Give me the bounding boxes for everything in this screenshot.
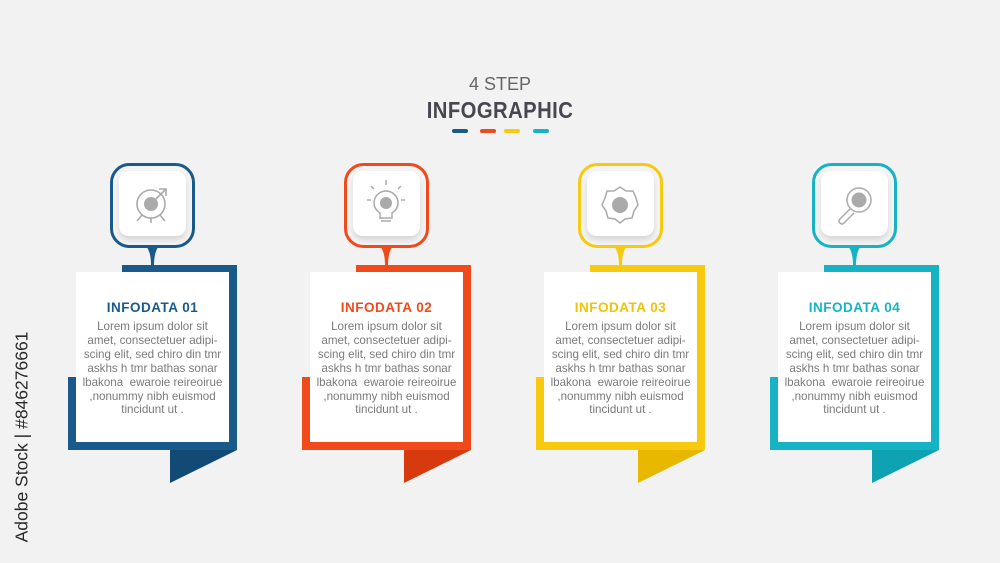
body text: scing elit, sed chiro din tmr: [552, 348, 689, 361]
body text: [551, 320, 690, 416]
body text: ,nonummy nibh euismod: [557, 390, 684, 403]
body text: lbakona ewaroie reireoirue: [551, 376, 690, 389]
body text: scing elit, sed chiro din tmr: [84, 348, 221, 361]
color dashes: [452, 129, 549, 133]
body text: ,nonummy nibh euismod: [323, 390, 450, 403]
body text: amet, consectetuer adipi-: [555, 334, 686, 347]
panel: infodata 02: [302, 163, 471, 483]
body text: Lorem ipsum dolor sit: [799, 320, 910, 333]
title: [427, 74, 573, 133]
body text: lbakona ewaroie reireoirue: [83, 376, 222, 389]
body text: ,nonummy nibh euismod: [791, 390, 918, 403]
body text: tincidunt ut .: [121, 403, 184, 416]
panel: infodata 01: [68, 163, 237, 483]
body text: lbakona ewaroie reireoirue: [785, 376, 924, 389]
body text: amet, consectetuer adipi-: [321, 334, 452, 347]
vertical stock id text: Adobe Stock | #846276661: [12, 332, 32, 542]
body text: [785, 320, 924, 416]
heading: INFODATA 03: [575, 300, 666, 315]
panel: infodata 03: [536, 163, 705, 483]
heading: INFODATA 04: [809, 300, 900, 315]
body text: [317, 320, 456, 416]
body text: lbakona ewaroie reireoirue: [317, 376, 456, 389]
body text: scing elit, sed chiro din tmr: [318, 348, 455, 361]
body text: tincidunt ut .: [355, 403, 418, 416]
body text: amet, consectetuer adipi-: [789, 334, 920, 347]
body text: Lorem ipsum dolor sit: [565, 320, 676, 333]
body text: amet, consectetuer adipi-: [87, 334, 218, 347]
body text: askhs h tmr bathas sonar: [321, 362, 452, 375]
body text: tincidunt ut .: [823, 403, 886, 416]
body text: ,nonummy nibh euismod: [89, 390, 216, 403]
heading: INFODATA 02: [341, 300, 432, 315]
body text: askhs h tmr bathas sonar: [555, 362, 686, 375]
body text: askhs h tmr bathas sonar: [789, 362, 920, 375]
panel: infodata 04: [770, 163, 939, 483]
body text: Lorem ipsum dolor sit: [331, 320, 442, 333]
body text: askhs h tmr bathas sonar: [87, 362, 218, 375]
body text: [83, 320, 222, 416]
heading: INFODATA 01: [107, 300, 198, 315]
body text: scing elit, sed chiro din tmr: [786, 348, 923, 361]
body text: Lorem ipsum dolor sit: [97, 320, 208, 333]
body text: tincidunt ut .: [589, 403, 652, 416]
heading: INFOGRAPHIC: INFOGRAPHIC: [427, 97, 573, 123]
subtitle: 4 STEP: 4 STEP: [469, 74, 531, 94]
